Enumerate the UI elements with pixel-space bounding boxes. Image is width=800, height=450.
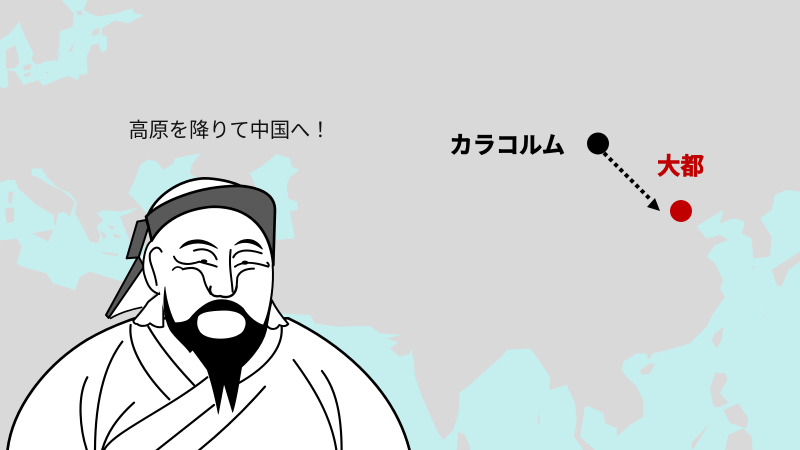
hat top [147,178,243,220]
hat band [146,186,275,265]
label: Karakorum: カラコルム [450,132,565,158]
arrow: route to Dadu [604,153,660,211]
hat knot [127,220,148,258]
marker: Karakorum dot [587,132,609,154]
beard and moustache [164,283,273,414]
title: speech text: 高原を降りて中国へ！ [128,119,330,142]
hat strap [106,256,144,318]
portrait: Kublai Khan [7,178,410,450]
chin [197,311,246,339]
collar ruffles [133,290,163,327]
face lines [265,265,273,327]
marker: Dadu dot [670,200,692,222]
neck cloth [107,250,157,317]
label: Dadu: 大都 [657,153,704,179]
robe lines [130,325,282,399]
robe body [7,318,410,450]
face [150,207,273,323]
ear [143,241,159,294]
